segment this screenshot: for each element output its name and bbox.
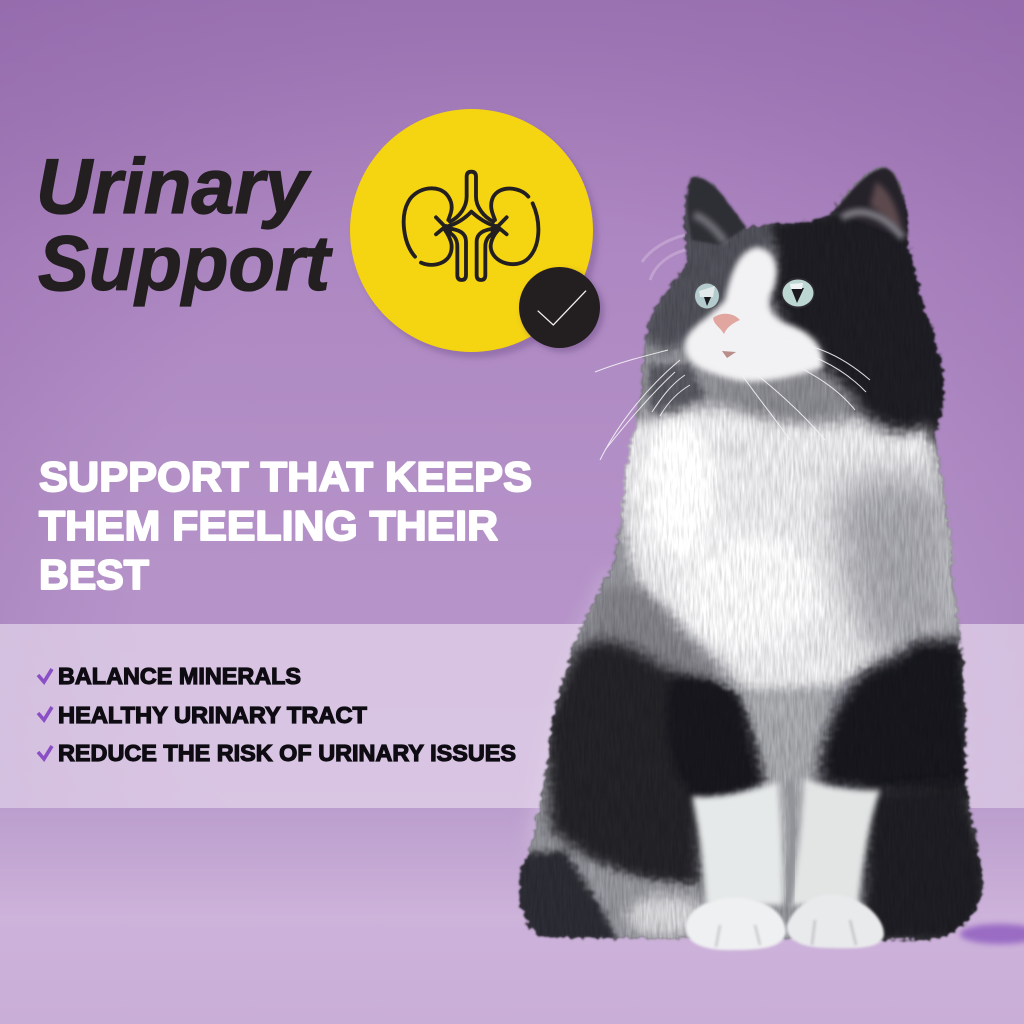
title: Urinary [36, 142, 312, 230]
translucent band behind the list [0, 624, 1024, 808]
cat floor shadow [960, 924, 1024, 944]
cat: nose [713, 314, 740, 334]
cat: left ear [687, 177, 746, 245]
cat: right ear [835, 168, 908, 238]
background: purple wall [0, 0, 1024, 810]
cat: right eye [781, 278, 815, 308]
heading [39, 453, 532, 598]
icon: yellow badge with kidneys [350, 109, 598, 358]
cat illustration [518, 166, 985, 952]
item: balance minerals: BALANCE MINERALS [58, 663, 301, 689]
cat: divider between forelegs [788, 780, 793, 905]
cat: pale halo of fur on the left [530, 570, 640, 850]
title: Support [38, 219, 333, 307]
item: healthy urinary tract: HEALTHY URINARY TRACT [58, 702, 368, 728]
cat: mouth [722, 351, 736, 358]
cat: right foreleg [790, 778, 880, 905]
heading: SUPPORT THAT KEEPS [39, 453, 532, 500]
icon: black check badge [519, 267, 604, 352]
cat: whiskers [595, 235, 870, 460]
cat: furry body with soft colour patches [518, 166, 985, 944]
floor [0, 808, 1024, 1024]
cat: right paw [787, 895, 884, 948]
heading: THEM FEELING THEIR [39, 502, 498, 549]
item: reduce risk: REDUCE THE RISK OF URINARY ISSUES [58, 740, 516, 766]
icon: kidneys [404, 172, 538, 280]
cat: left eye [694, 282, 720, 310]
cat: left paw [686, 898, 786, 950]
cat: white muzzle and blaze [685, 247, 823, 382]
heading: BEST [39, 551, 149, 598]
title [36, 142, 333, 307]
cat: left foreleg [692, 782, 783, 905]
benefits list [38, 663, 516, 766]
